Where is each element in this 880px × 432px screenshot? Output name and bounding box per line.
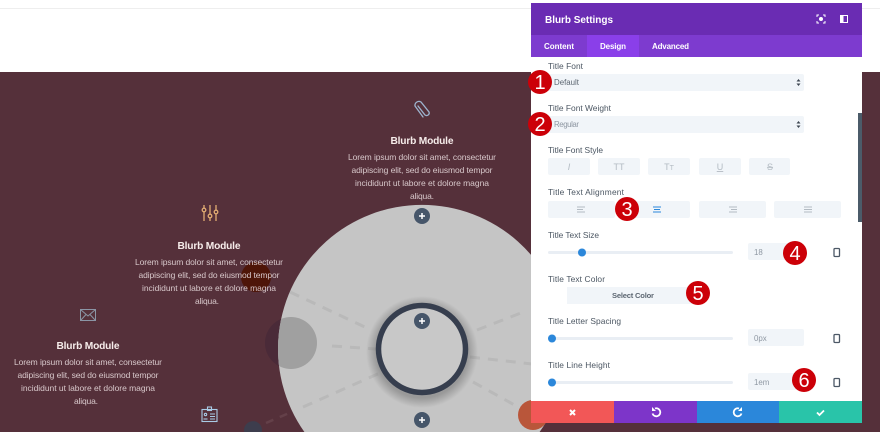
field: title text color (548, 274, 695, 304)
blurb: middle (135, 205, 283, 306)
blurb: top (348, 101, 496, 201)
blurb title: Blurb Module (56, 341, 120, 352)
blurb body: aliqua. (410, 191, 434, 201)
scrollbar (858, 113, 862, 222)
field: title text alignment: Title Text Alignment (548, 187, 625, 197)
blurb body: adipiscing elit, sed do eiusmod tempor (18, 370, 159, 380)
button: discard (531, 401, 614, 423)
number marker 1 (528, 70, 552, 94)
plus button: bottom (414, 412, 430, 428)
field: title font weight: Regular (554, 120, 579, 129)
blurb body: adipiscing elit, sed do eiusmod tempor (352, 165, 493, 175)
field: title font weight (548, 103, 804, 133)
panel footer buttons (531, 401, 862, 423)
number marker 4: 4 (789, 243, 801, 265)
button: undo (614, 401, 697, 423)
number marker 5 (686, 281, 710, 305)
decorative circle: small dark (244, 421, 262, 432)
field: title text size: 18 (754, 248, 763, 257)
icon: phone (834, 334, 840, 342)
blurb title: Blurb Module (390, 136, 454, 147)
panel tabs: Advanced (652, 42, 689, 51)
blurb body: incididunt ut labore et dolore magna (355, 178, 489, 188)
top white page bar (0, 0, 880, 72)
blurb body (135, 257, 283, 306)
field: title font: Title Font (548, 61, 584, 71)
number marker 6: 6 (798, 370, 810, 392)
button: save (779, 401, 862, 423)
field: title text alignment (548, 187, 841, 218)
blurb body: Lorem ipsum dolor sit amet, consectetur (14, 357, 162, 367)
field: title text color: Title Text Color (548, 274, 605, 284)
panel tabs: Design (600, 42, 626, 51)
field: title font weight: Title Font Weight (548, 103, 612, 113)
wheel (278, 204, 545, 432)
number marker 3 (615, 197, 639, 221)
decorative circle: orange (518, 400, 548, 430)
blurb body: adipiscing elit, sed do eiusmod tempor (138, 270, 280, 280)
blurb body: Lorem ipsum dolor sit amet, consectetur (348, 152, 496, 162)
number marker 6 (792, 368, 816, 392)
wheel disc (278, 205, 566, 432)
wheel dashed spokes (290, 292, 532, 408)
field: title letter spacing: Title Letter Spacing (548, 316, 621, 326)
icon: id card (202, 407, 217, 422)
blurb body: aliqua. (74, 396, 98, 406)
field: title font style: TT (614, 162, 625, 172)
centre ring shadow (366, 296, 478, 408)
blurb body: aliqua. (195, 296, 219, 306)
icon: expand (817, 15, 825, 23)
blurb body: incididunt ut labore et dolore magna (21, 383, 155, 393)
icon: envelope (80, 310, 96, 320)
field: title font style: U (717, 162, 723, 172)
blurb body: incididunt ut labore et dolore magna (142, 283, 276, 293)
panel tabs (531, 35, 862, 57)
blurb body: Lorem ipsum dolor sit amet, consectetur (135, 257, 283, 267)
panel tabs: Content (544, 42, 574, 51)
field: title font style: TT (664, 162, 675, 172)
field: title font (548, 61, 804, 91)
field: title text size: Title Text Size (548, 230, 599, 240)
plus button: top (414, 208, 430, 224)
number marker 2 (528, 112, 552, 136)
panel body (531, 57, 862, 402)
field: title text size (548, 230, 840, 260)
icon: phone (834, 378, 840, 386)
button: redo (697, 401, 779, 423)
number marker 5: 5 (692, 283, 704, 305)
number marker 3: 3 (621, 199, 633, 221)
blurb title: Blurb Module (178, 241, 241, 252)
settings panel (531, 3, 862, 423)
faint dashes outside wheel (266, 407, 303, 423)
panel header (531, 3, 862, 35)
field: title font: Default (554, 78, 580, 87)
decorative circle: dark dotted behind wheel (265, 317, 317, 369)
centre ring (378, 306, 466, 392)
field: title font style: S (767, 162, 773, 172)
field: title font style (548, 145, 790, 175)
icon: sliders (202, 205, 218, 221)
number marker 4 (783, 241, 807, 265)
field: title line height: 1em (754, 378, 770, 387)
field: title line height (548, 360, 840, 390)
icon: sidebar (840, 15, 848, 23)
field: title letter spacing (548, 316, 840, 346)
field: title font style: Title Font Style (548, 145, 603, 155)
plus button: centre (414, 313, 430, 329)
wheel grey circle (278, 317, 317, 369)
field: title letter spacing: 0px (754, 334, 767, 343)
number marker 2: 2 (534, 114, 546, 136)
blurb: left (14, 310, 162, 406)
icon: phone (834, 248, 840, 256)
field: title line height: Title Line Height (548, 360, 611, 370)
blurb body (14, 357, 162, 406)
blurb body (348, 152, 496, 201)
decorative circle: dark red (241, 262, 271, 292)
field: title font style: I (568, 162, 571, 172)
number marker 1: 1 (534, 72, 546, 94)
panel title: Blurb Settings (545, 15, 613, 26)
field: title text color: Select Color (612, 291, 654, 300)
icon: paperclip (415, 101, 429, 117)
